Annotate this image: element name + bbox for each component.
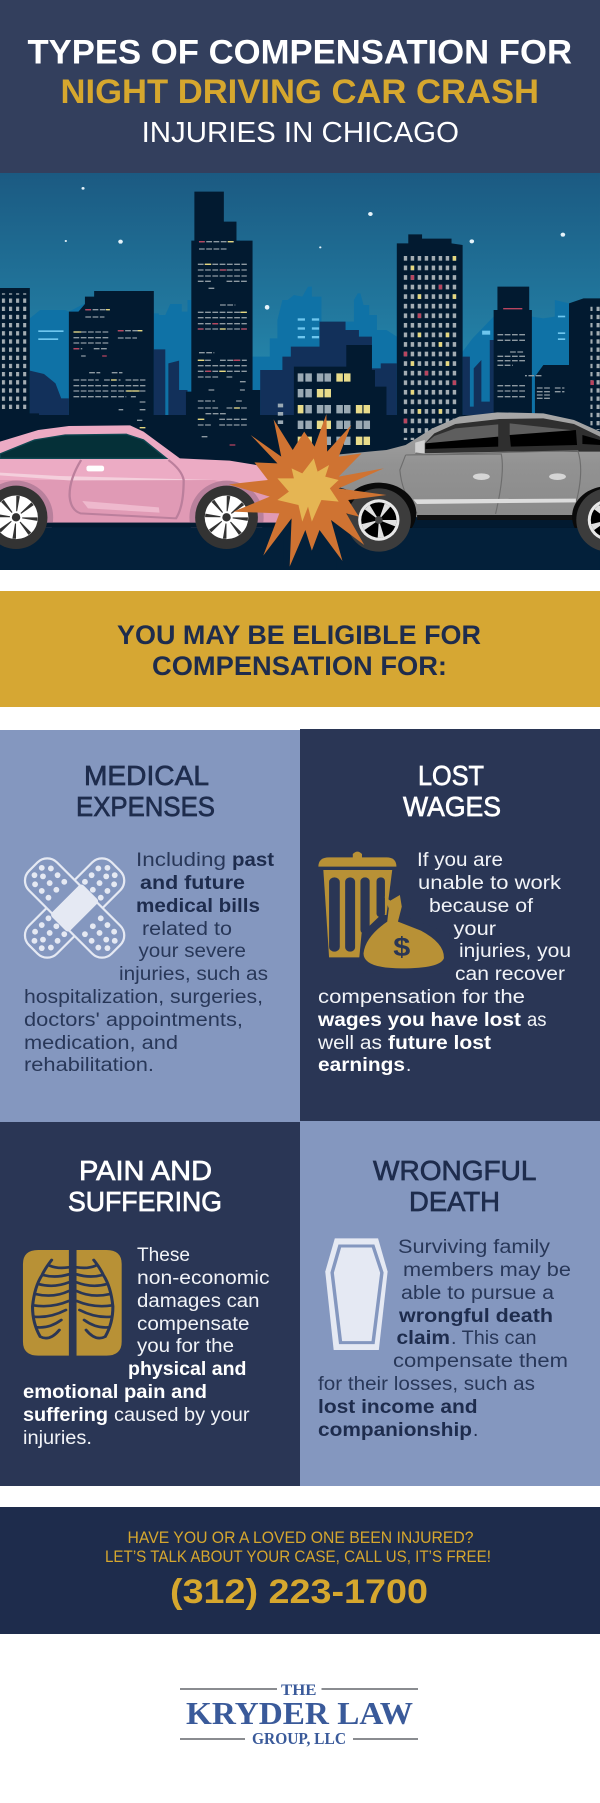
text: medical expenses: medical bills: [136, 896, 260, 917]
text: medical expenses: rehabilitation.: [24, 1055, 154, 1076]
logo: The Kryder Law Group: THE: [281, 1682, 316, 1699]
text: pain and suffering: suffering: [23, 1405, 108, 1426]
text: medical expenses: Including: [136, 850, 226, 871]
heading: medical expenses: [76, 760, 215, 822]
call to action text: [105, 1528, 491, 1566]
text: pain and suffering: physical and: [128, 1359, 246, 1380]
text: lost wages: compensation for the: [318, 987, 525, 1008]
logo: The Kryder Law Group: GROUP, LLC: [252, 1729, 346, 1748]
banner heading: COMPENSATION FOR:: [152, 651, 447, 681]
heading: medical expenses: EXPENSES: [76, 791, 215, 822]
call to action text: HAVE YOU OR A LOVED ONE BEEN INJURED?: [128, 1528, 474, 1547]
text: lost wages: injuries, you: [459, 941, 571, 962]
heading: lost wages: WAGES: [403, 791, 501, 822]
heading: pain and suffering: [68, 1155, 222, 1217]
text: wrongful death: [318, 1237, 571, 1441]
banner heading: [117, 620, 481, 681]
grey car: [338, 412, 600, 552]
illustration: night city car crash: [0, 173, 600, 570]
panel: call to action: [0, 1507, 600, 1634]
text: medical expenses: and future: [140, 873, 245, 894]
dollar sign: $: [393, 933, 410, 962]
text: medical expenses: medication, and: [24, 1033, 178, 1054]
text: wrongful death: compensate them: [393, 1351, 568, 1372]
text: lost wages: future lost: [388, 1033, 492, 1054]
text: pain and suffering: you for the: [137, 1336, 234, 1357]
mid buildings: [30, 322, 494, 415]
text: lost wages: because of: [429, 896, 534, 917]
text: pain and suffering: [23, 1245, 270, 1449]
phone number: (312) 223-1700: [170, 1573, 428, 1611]
heading: lost wages: LOST: [418, 760, 484, 791]
text: medical expenses: your severe: [138, 941, 246, 962]
text: medical expenses: [24, 850, 275, 1076]
heading: lost wages: [403, 760, 501, 822]
heading: wrongful death: [373, 1155, 536, 1217]
title line 1: TYPES OF COMPENSATION FOR: [28, 34, 572, 72]
banner: eligibility: [0, 591, 600, 707]
pink car: [0, 425, 280, 549]
text: wrongful death: claim: [396, 1328, 450, 1349]
back skyline: [30, 286, 569, 415]
text: wrongful death: lost income and: [318, 1397, 478, 1418]
text: pain and suffering: These: [137, 1245, 190, 1266]
text: pain and suffering: non-economic: [137, 1268, 270, 1289]
text: pain and suffering: injuries.: [23, 1428, 92, 1449]
call to action text: LET’S TALK ABOUT YOUR CASE, CALL US, IT’S FREE!: [105, 1547, 491, 1566]
office strip windows: [73, 242, 564, 437]
large windows building: [278, 373, 370, 445]
heading: wrongful death: DEATH: [409, 1186, 500, 1217]
icon: rib cage: [23, 1250, 122, 1356]
title line 2: NIGHT DRIVING CAR CRASH: [60, 73, 539, 111]
text: pain and suffering: damages can: [137, 1291, 260, 1312]
road: [52, 524, 342, 570]
text: wrongful death: . This can: [451, 1328, 536, 1349]
heading: pain and suffering: SUFFERING: [68, 1186, 222, 1217]
text: lost wages: [317, 850, 571, 1076]
grey car rear wheel: [576, 488, 600, 552]
panel: medical expenses: [0, 730, 300, 1122]
text: wrongful death: companionship: [318, 1420, 472, 1441]
text: lost wages: your: [454, 919, 497, 940]
dark towers: [0, 192, 600, 527]
panel: pain and suffering: [0, 1122, 300, 1486]
logo: The Kryder Law Group: KRYDER LAW: [186, 1695, 413, 1731]
text: wrongful death: for their losses, such as: [318, 1374, 535, 1395]
heading: wrongful death: WRONGFUL: [373, 1155, 536, 1186]
text: medical expenses: past: [232, 850, 275, 871]
text: medical expenses: doctors' appointments,: [24, 1010, 243, 1031]
grey car front wheel: [347, 488, 411, 552]
text: wrongful death: able to pursue a: [401, 1283, 554, 1304]
text: medical expenses: related to: [142, 919, 232, 940]
pink car front wheel: [195, 486, 258, 549]
text: lost wages: wages you have lost: [317, 1010, 522, 1031]
text: lost wages: unable to work: [418, 873, 562, 894]
text: lost wages: as: [527, 1010, 546, 1031]
text: wrongful death: members may be: [403, 1260, 571, 1281]
text: wrongful death: wrongful death: [398, 1306, 553, 1327]
title line 3: INJURIES IN CHICAGO: [142, 117, 459, 149]
icon: crossed bandages: [19, 853, 130, 963]
logo: The Kryder Law Group: [180, 1682, 418, 1748]
text: wrongful death: .: [473, 1420, 478, 1441]
text: lost wages: can recover: [455, 964, 566, 985]
text: lost wages: If you are: [417, 850, 503, 871]
banner heading: YOU MAY BE ELIGIBLE FOR: [117, 620, 481, 650]
text: pain and suffering: caused by your: [114, 1405, 250, 1426]
icon: coffin: [325, 1238, 388, 1350]
crash burst: [229, 414, 386, 567]
heading: medical expenses: MEDICAL: [84, 760, 209, 791]
windows: left tower and right towers: [0, 293, 28, 410]
text: lost wages: earnings: [318, 1055, 405, 1076]
panel: wrongful death: [300, 1121, 600, 1486]
text: pain and suffering: emotional pain and: [23, 1382, 207, 1403]
pink car rear wheel: [0, 486, 47, 549]
text: medical expenses: injuries, such as: [119, 964, 268, 985]
text: pain and suffering: compensate: [137, 1314, 250, 1335]
panel: lost wages: [300, 729, 600, 1121]
icon: trash can with money bag: [318, 852, 450, 973]
text: wrongful death: Surviving family: [398, 1237, 551, 1258]
text: lost wages: well as: [317, 1033, 382, 1054]
text: medical expenses: hospitalization, surgeries,: [24, 987, 263, 1008]
text: lost wages: .: [406, 1055, 411, 1076]
stars: [65, 187, 565, 310]
panel: header: [0, 0, 600, 173]
heading: pain and suffering: PAIN AND: [79, 1155, 212, 1186]
light windows in back skyline: [38, 316, 565, 340]
